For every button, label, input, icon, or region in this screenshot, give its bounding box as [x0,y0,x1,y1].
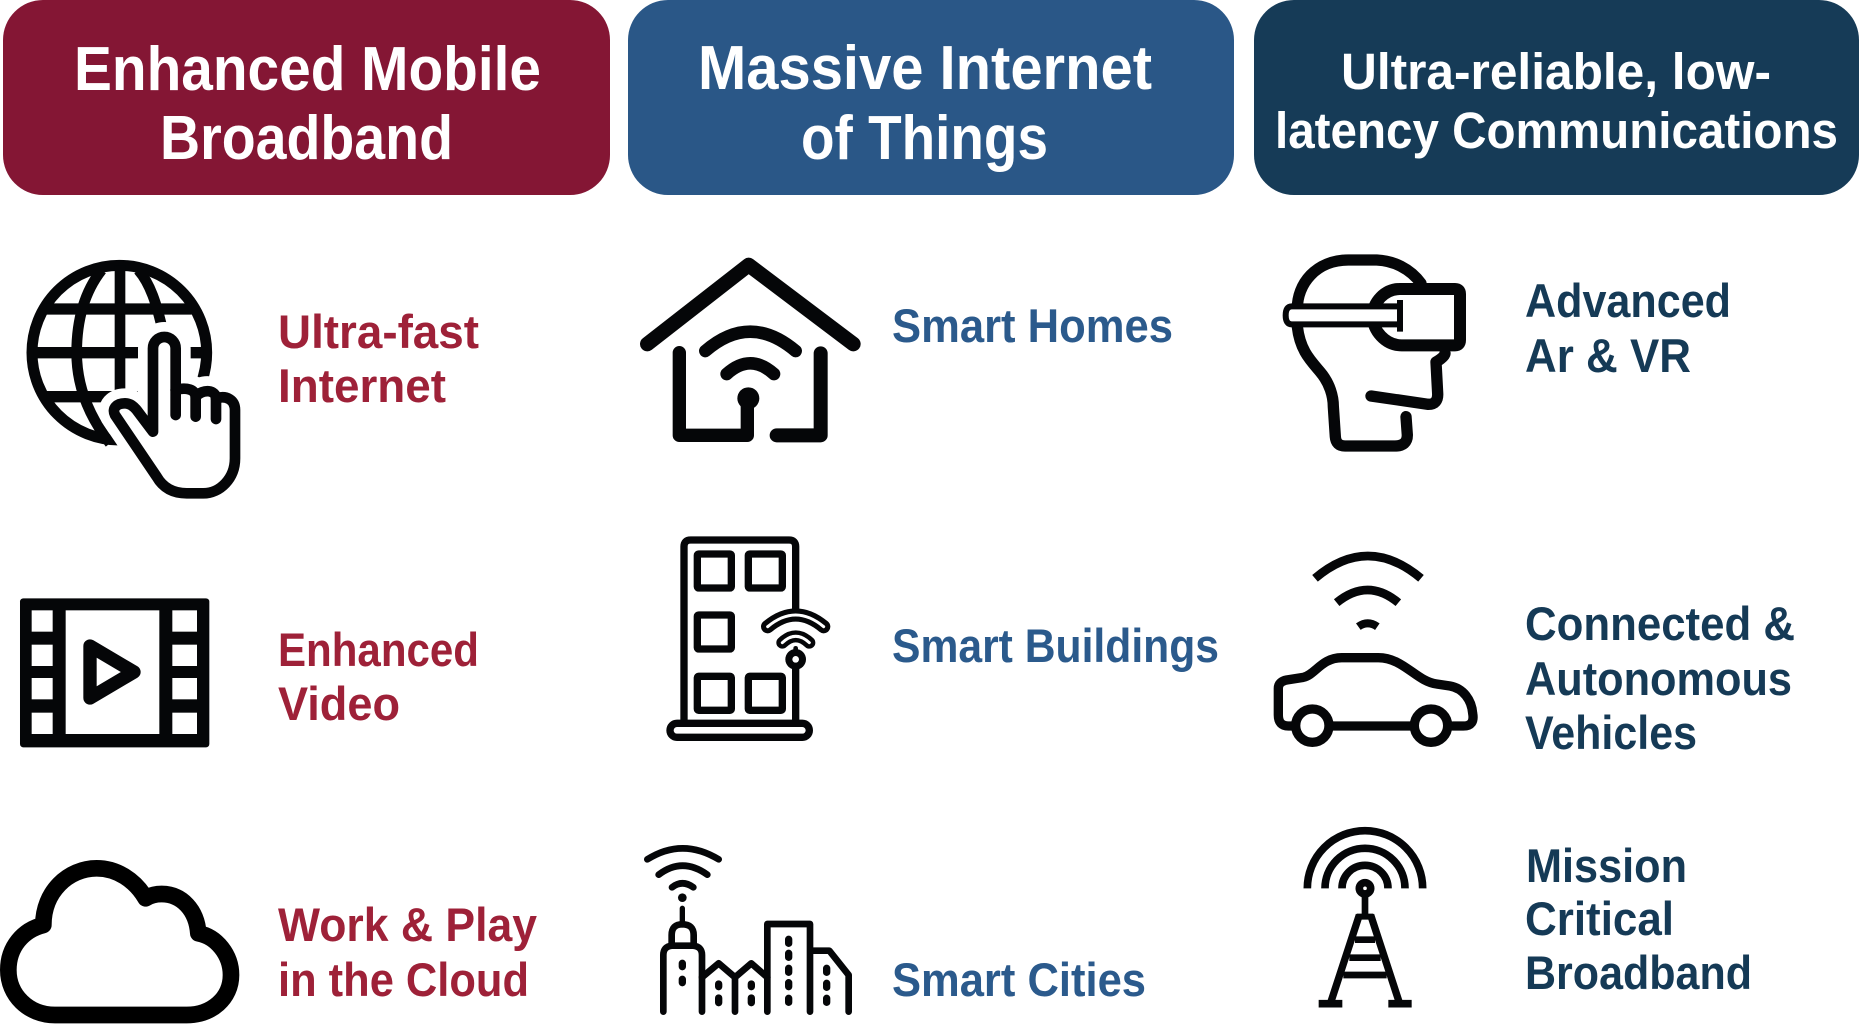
label: Mission Critical Broadband: Broadband [1525,946,1752,999]
icon: globe with pointing hand [32,265,235,493]
header: Enhanced Mobile Broadband: Enhanced Mobile [74,35,541,104]
icon: video film strip [20,598,209,747]
label: Enhanced Video [278,623,479,730]
label: Advanced AR & VR: Advanced [1525,274,1731,327]
label: Mission Critical Broadband: Mission [1526,839,1687,892]
label: Mission Critical Broadband [1525,839,1752,999]
label: Advanced AR & VR [1525,274,1731,382]
label: Enhanced Video: Enhanced [278,623,479,676]
header: Enhanced Mobile Broadband: Broadband [160,104,453,173]
label: Enhanced Video: Video [278,677,400,730]
icon: VR headset on head [1286,260,1460,446]
label: Mission Critical Broadband: Critical [1525,892,1674,945]
header: Ultra-reliable, low-latency Communications: Ultra-reliable, low- [1341,43,1771,100]
label: Work & Play in the Cloud: in the Cloud [278,953,529,1006]
label: Ultra-fast Internet [278,305,479,412]
header: Massive Internet of Things: Massive Internet [698,34,1152,103]
header: Ultra-reliable, low-latency Communications [1254,0,1859,195]
panel: Enhanced Mobile Broadband column [3,0,610,1015]
label: Smart Homes: Smart Homes [892,299,1173,352]
label: Work & Play in the Cloud: Work & Play [278,898,537,951]
label: Connected & Autonomous Vehicles: Autonomous [1525,652,1792,705]
header: Massive Internet of Things [628,0,1234,195]
label: Advanced AR & VR: Ar & VR [1525,329,1691,382]
label: Connected & Autonomous Vehicles [1525,597,1795,759]
icon: smart home [647,265,853,435]
header: Massive Internet of Things: of Things [801,104,1048,173]
header: Enhanced Mobile Broadband [3,0,610,195]
icon: broadcast tower [1307,831,1423,1004]
label: Connected & Autonomous Vehicles: Connected & [1525,597,1795,650]
label: Ultra-fast Internet: Internet [278,359,446,412]
panel: Massive Internet of Things column [628,0,1234,1012]
label: Smart Cities: Smart Cities [892,953,1146,1006]
label: Connected & Autonomous Vehicles: Vehicles [1525,706,1697,759]
label: Smart Buildings: Smart Buildings [892,619,1219,672]
icon: smart city [647,848,849,1012]
icon: smart building [670,540,824,737]
label: Ultra-fast Internet: Ultra-fast [278,305,479,358]
label: Work & Play in the Cloud [278,898,537,1006]
icon: connected car [1278,556,1473,742]
icon: cloud [8,868,231,1015]
panel: Ultra-reliable, low-latency Communications column [1254,0,1859,1004]
